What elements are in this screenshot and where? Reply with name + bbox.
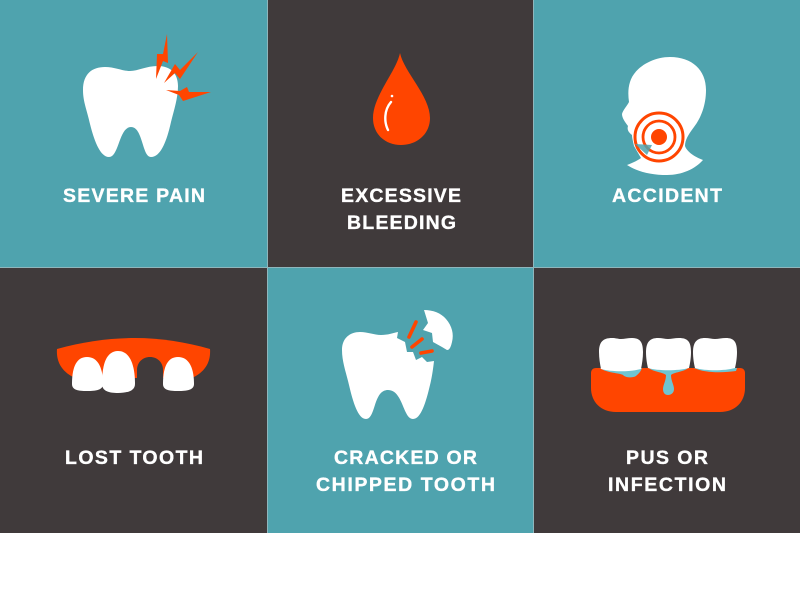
icon: head with target — [622, 57, 706, 175]
panel: accident — [534, 0, 800, 267]
icon: infected gums — [591, 338, 745, 412]
label: cracked or chipped tooth: CRACKED OR — [334, 447, 477, 469]
panel: lost tooth — [0, 268, 267, 533]
label: accident: ACCIDENT — [612, 185, 722, 207]
panel: severe pain — [0, 0, 267, 267]
label: pus or infection: INFECTION — [608, 474, 726, 496]
label: excessive bleeding — [341, 185, 461, 234]
icon: gum with missing tooth — [57, 338, 210, 393]
icon: chipped tooth — [342, 310, 453, 419]
panel: pus or infection — [534, 268, 800, 533]
icon: aching tooth — [83, 34, 211, 157]
label: pus or infection — [608, 447, 726, 496]
label: excessive bleeding: EXCESSIVE — [341, 185, 461, 207]
label: lost tooth: LOST TOOTH — [65, 447, 203, 469]
icon: blood drop — [373, 53, 430, 145]
panel: excessive bleeding — [268, 0, 533, 267]
label: pus or infection: PUS OR — [626, 447, 708, 469]
label: cracked or chipped tooth: CHIPPED TOOTH — [316, 474, 495, 496]
panel: cracked or chipped tooth — [268, 268, 533, 533]
label: cracked or chipped tooth — [316, 447, 495, 496]
label: excessive bleeding: BLEEDING — [347, 212, 456, 234]
label: severe pain: SEVERE PAIN — [63, 185, 205, 207]
